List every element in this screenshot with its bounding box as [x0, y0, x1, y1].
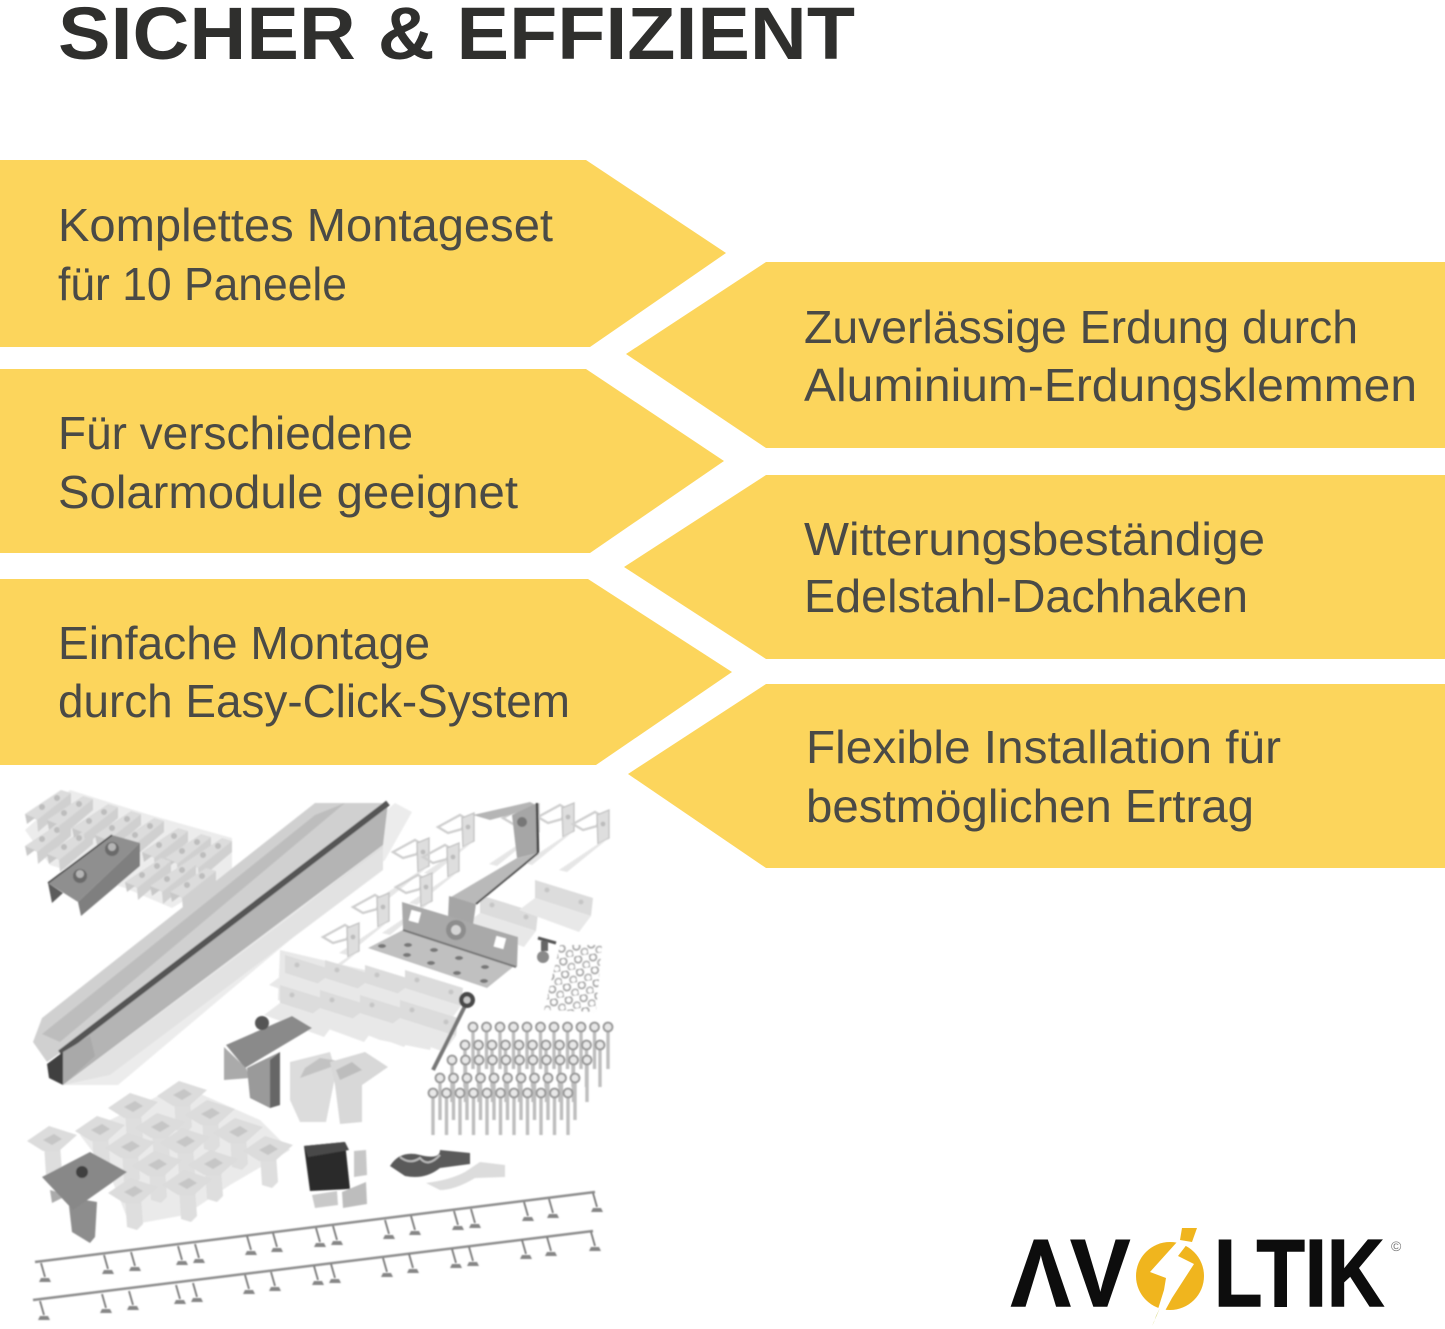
logo icon: yellow circle with lightning bolt: [1136, 1228, 1204, 1326]
banner: verschiedene Solarmodule: Für verschiedene: [58, 407, 413, 459]
logo: Avoltik: ΛV: [1011, 1220, 1130, 1327]
banner: zuverlässige Erdung: [626, 262, 1445, 448]
banner: flexible Installation: [628, 684, 1445, 868]
banner: flexible Installation: bestmöglichen Ertrag: [806, 780, 1254, 832]
banner: zuverlässige Erdung: Zuverlässige Erdung durch: [804, 301, 1358, 353]
product illustration: mounting kit: [25, 790, 612, 1320]
banner: verschiedene Solarmodule: [0, 369, 724, 553]
banner: verschiedene Solarmodule: Solarmodule geeignet: [58, 466, 518, 518]
screws: [429, 992, 612, 1135]
banner: Komplettes Montageset: [0, 160, 726, 347]
banner: Komplettes Montageset: Komplettes Montageset: [58, 199, 553, 251]
banner: witterungsbeständige Dachhaken: Edelstahl-Dachhaken: [804, 570, 1248, 622]
main roof hook: [368, 802, 538, 988]
banner: flexible Installation: Flexible Installation für: [806, 721, 1281, 773]
dark center clamp with faded clamps: [224, 1016, 388, 1124]
banner: witterungsbeständige Dachhaken: Witterungsbeständige: [804, 513, 1265, 565]
mid clamps group: [25, 790, 232, 916]
earthing rail 2: [33, 1231, 601, 1320]
faded roof hooks: [264, 803, 609, 1052]
logo: Avoltik: [1011, 1220, 1402, 1327]
end clamps group: [27, 1081, 293, 1243]
banner: zuverlässige Erdung: Aluminium-Erdungsklemmen: [804, 359, 1417, 411]
logo: Avoltik: LTIK: [1214, 1220, 1384, 1327]
mounting rails: [33, 803, 412, 1085]
banner: Komplettes Montageset: für 10 Paneele: [58, 258, 347, 310]
banner: witterungsbeständige Dachhaken: [624, 475, 1445, 659]
banner: einfache Montage: durch Easy-Click-System: [58, 675, 570, 727]
cable connectors: [390, 1150, 505, 1190]
earthing rail 1: [35, 1192, 603, 1282]
junction box and caps: [304, 1142, 367, 1208]
banner: einfache Montage: Einfache Montage: [58, 617, 430, 669]
washers and small bolt: [537, 938, 602, 1012]
logo: Avoltik: ©: [1391, 1238, 1402, 1254]
banner: einfache Montage: [0, 579, 732, 765]
